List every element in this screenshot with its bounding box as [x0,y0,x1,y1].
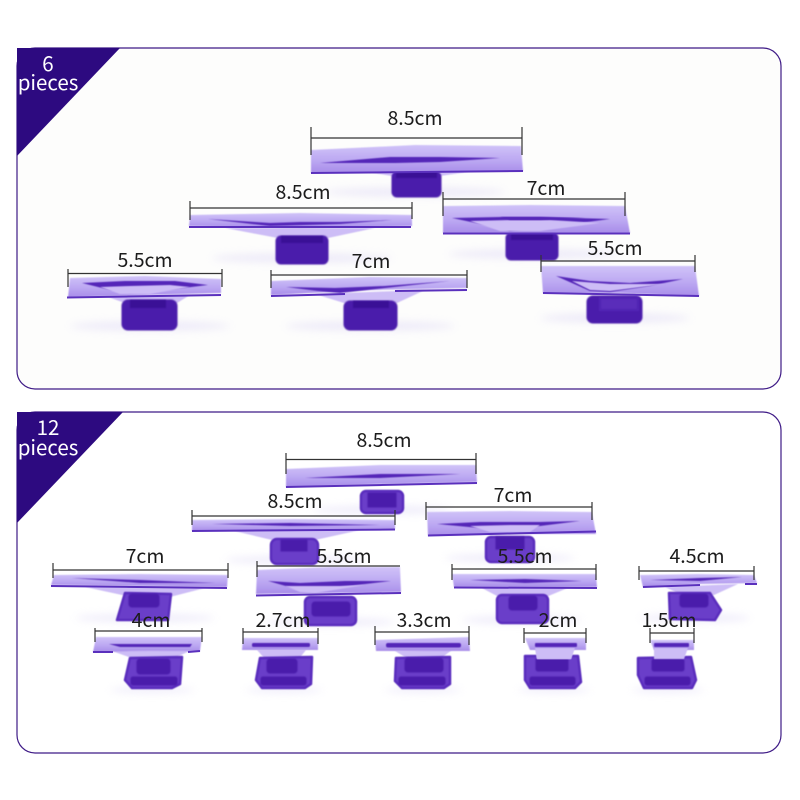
tool: 7cm upper right [443,172,630,260]
tool: 5.5cm right: 5.5cm [587,232,643,261]
tool: 4.5cm [639,540,757,622]
tool: 8.5cm top [311,102,523,197]
tool: 5.5cm right [452,540,597,624]
badge: 12 pieces [17,411,123,523]
tool: 4cm: 4cm [132,604,170,633]
badge: 6 pieces [17,47,120,156]
badge: 6 pieces: 6 [42,47,54,77]
tool: 5.5cm right [540,232,699,323]
tool: 4.5cm: 4.5cm [669,540,725,569]
tool: 7cm upper right [426,479,596,562]
tool: 7cm upper right: 7cm [527,172,565,201]
tool: 3.3cm: 3.3cm [396,604,452,633]
tool: 8.5cm second [192,485,395,564]
tool: 7cm left: 7cm [126,540,164,569]
tool: 5.5cm centre [256,540,401,626]
panel: 12 pieces [17,411,781,753]
tool: 2cm: 2cm [539,604,577,633]
tool: 5.5cm right: 5.5cm [497,540,553,569]
tool: 7cm upper right: 7cm [494,479,532,508]
badge: 12 pieces: pieces [18,431,78,461]
tool: 4cm [93,604,202,693]
tool: 7cm left [51,540,228,622]
tool: 8.5cm middle [189,176,412,264]
tool: 5.5cm centre: 5.5cm [316,540,372,569]
tool: 7cm lower middle: 7cm [352,245,390,274]
tool: 8.5cm top: 8.5cm [387,102,443,131]
badge: 6 pieces: pieces [18,66,78,96]
tool: 8.5cm top: 8.5cm [356,424,412,453]
tool: 2cm [518,604,590,693]
tool: 3.3cm [375,604,470,693]
tool: 5.5cm left [67,244,230,331]
badge: 12 pieces: 12 [37,411,59,441]
tool: 8.5cm second: 8.5cm [267,485,323,514]
tool: 2.7cm: 2.7cm [255,604,311,633]
panel: 6 pieces [17,47,781,389]
tool: 7cm lower middle [271,245,467,331]
tool: 5.5cm left: 5.5cm [117,244,173,273]
tool: 1.5cm: 1.5cm [641,604,697,633]
tool: 8.5cm middle: 8.5cm [275,176,331,205]
tool: 1.5cm [632,604,704,693]
tool: 2.7cm [242,604,322,693]
tool: 8.5cm top [286,424,477,514]
